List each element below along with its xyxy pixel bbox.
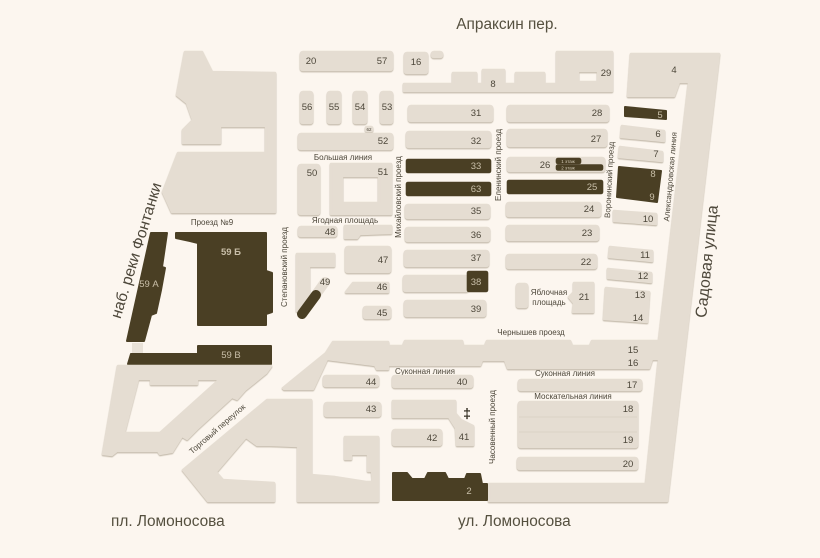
building 41: 41 (459, 432, 469, 443)
building 4 and Садовая улица: 4 (671, 65, 677, 76)
building 22 (506, 254, 597, 269)
building 31: 31 (471, 108, 481, 119)
label: Яблочная площадь: площадь (532, 298, 566, 307)
building 50 (298, 164, 320, 215)
building 62 (365, 126, 373, 132)
building next to 48 (345, 226, 391, 238)
building 5 (625, 107, 666, 121)
building 49 (297, 254, 334, 314)
building 56 (300, 91, 313, 124)
building 21 (569, 283, 593, 312)
building 26: 26 (540, 160, 550, 171)
label: наб. реки Фонтанки: наб. реки Фонтанки (108, 181, 165, 321)
building 41 (393, 401, 473, 445)
building 25: 25 (587, 182, 597, 193)
building 51 (331, 164, 391, 214)
icon: orthodox cross: ‡ (463, 405, 471, 421)
label: ул. Ломоносова: ул. Ломоносова (458, 513, 571, 530)
building 39: 39 (471, 304, 481, 315)
buildings 8 and 9: 9 (649, 192, 655, 203)
building 35 (405, 204, 490, 219)
building 35: 35 (471, 206, 481, 217)
building 21: 21 (579, 292, 589, 303)
building 4 and Садовая улица: 15 (628, 345, 638, 356)
building 23 (506, 225, 599, 241)
building 28: 28 (592, 108, 602, 119)
label: Москательная линия: Москательная линия (534, 392, 612, 401)
building: south-west lower block (183, 400, 378, 501)
buildings 8 and 9: 8 (650, 169, 656, 180)
label: Садовая улица: Садовая улица (693, 204, 722, 319)
building 16 north (404, 52, 428, 74)
building 54: 54 (355, 102, 365, 113)
label: Суконная линия east: Суконная линия (535, 369, 595, 378)
building 37 (404, 250, 489, 267)
label: Воронинский проезд: Воронинский проезд (603, 141, 616, 218)
building 59 А: 59 А (139, 279, 159, 290)
building 45 (363, 306, 391, 319)
building 59 В: 59 В (221, 350, 241, 361)
building 40: 40 (457, 377, 467, 388)
building 47: 47 (378, 255, 388, 266)
buildings 13 and 14 (604, 288, 649, 324)
label: Ягодная площадь: Ягодная площадь (312, 216, 378, 225)
building 23: 23 (582, 228, 592, 239)
buildings 8 and 9 (617, 167, 661, 203)
buildings 13 and 14: 14 (633, 313, 643, 324)
building 27 (507, 129, 607, 147)
building 16 north: 16 (411, 57, 421, 68)
building 26: 1 этаж (561, 159, 575, 164)
building 32 (406, 131, 491, 148)
building 43 (324, 402, 381, 417)
building 53 (380, 91, 393, 124)
building 17 (518, 379, 642, 391)
building 6: 6 (655, 129, 661, 140)
building 33: 33 (471, 161, 481, 172)
building 44 (323, 375, 379, 388)
building 27: 27 (591, 134, 601, 145)
building 38: 38 (471, 277, 481, 288)
label: Чернышев проезд: Чернышев проезд (497, 328, 565, 337)
building 38 (403, 271, 488, 292)
building 20-57: 57 (377, 56, 387, 67)
building 56: 56 (302, 102, 312, 113)
building 24 (506, 202, 601, 217)
building 32: 32 (471, 136, 481, 147)
building 12: 12 (638, 271, 648, 282)
building 63: 63 (471, 184, 481, 195)
building 4 and Садовая улица: 16 (628, 358, 638, 369)
buildings 18 and 19: 18 (623, 404, 633, 415)
building 63 (406, 182, 491, 196)
building 47 (345, 246, 391, 273)
building 52: 52 (378, 136, 388, 147)
building 5: 5 (657, 110, 663, 121)
building 12 (608, 269, 651, 282)
building 36 (405, 227, 490, 242)
buildings 18 and 19: 19 (623, 435, 633, 446)
building 62: 62 (366, 127, 372, 132)
building 10: 10 (643, 214, 653, 225)
building 48: 48 (325, 227, 335, 238)
building 59 Б (176, 233, 272, 325)
building 51: 51 (378, 167, 388, 178)
building 28 (507, 105, 609, 122)
small kiosk (431, 51, 443, 58)
building 48 (298, 226, 337, 238)
building 20-57: 20 (306, 56, 316, 67)
label: Степановский проезд: Степановский проезд (280, 227, 289, 307)
building: south-west frame (103, 366, 271, 455)
building 26 (507, 157, 605, 172)
label: Михайловский проезд: Михайловский проезд (394, 156, 403, 238)
building 33 (406, 159, 491, 173)
building 59 В (128, 346, 271, 364)
building 59 Б: 59 Б (221, 247, 241, 258)
building 54 (353, 91, 367, 124)
building 2: 2 (466, 486, 472, 497)
label: Еленинский проезд: Еленинский проезд (494, 129, 503, 201)
building 42 (392, 429, 442, 446)
building 31 (408, 105, 493, 122)
building 11 (609, 247, 652, 261)
building 37: 37 (471, 253, 481, 264)
buildings 18 and 19 (518, 401, 638, 448)
building 11: 11 (640, 250, 650, 261)
building 36: 36 (471, 230, 481, 241)
building 49: 49 (320, 277, 330, 288)
building 50: 50 (307, 168, 317, 179)
buildings 13 and 14: 13 (635, 290, 645, 301)
building 59 А (127, 233, 167, 341)
buildings 8 and 29 (404, 52, 612, 91)
building 6 (621, 126, 664, 141)
building 46 (346, 282, 388, 293)
building 39 (404, 300, 486, 317)
building 20 south (517, 457, 638, 470)
building 7 (619, 147, 662, 161)
building 10 (614, 211, 656, 225)
building 40 (392, 375, 473, 388)
buildings 8 and 29: 29 (601, 68, 611, 79)
building 53: 53 (382, 102, 392, 113)
label: Часовенный проезд: Часовенный проезд (488, 390, 497, 464)
building 52 (298, 133, 393, 150)
street label: Апраксин пер.: Апраксин пер. (456, 16, 558, 33)
building 44: 44 (366, 377, 376, 388)
connector between 59 А and 59 В (132, 343, 143, 353)
building 55: 55 (329, 102, 339, 113)
building 45: 45 (377, 308, 387, 319)
label: пл. Ломоносова: пл. Ломоносова (111, 513, 225, 530)
building 42: 42 (427, 433, 437, 444)
building 24: 24 (584, 204, 594, 215)
label: Александровская линия: Александровская линия (662, 132, 679, 222)
building beside Яблочная площадь (516, 283, 528, 308)
label: Большая линия: Большая линия (314, 153, 372, 162)
building 2 (393, 473, 487, 500)
label: Суконная линия west: Суконная линия (395, 367, 455, 376)
building: large north-west block (163, 52, 275, 212)
building 4 and Садовая улица (283, 54, 719, 501)
building 7: 7 (653, 149, 659, 160)
label: Проезд №9: Проезд №9 (191, 218, 234, 227)
label: Торговый переулок: Торговый переулок (188, 402, 248, 456)
building 20-57 (300, 51, 393, 71)
building 25 (507, 180, 603, 194)
building 17: 17 (627, 380, 637, 391)
building 20 south: 20 (623, 459, 633, 470)
label: Яблочная площадь: Яблочная (531, 288, 567, 297)
building 46: 46 (377, 282, 387, 293)
building 43: 43 (366, 404, 376, 415)
building 22: 22 (581, 257, 591, 268)
building 55 (327, 91, 341, 124)
buildings 8 and 29: 8 (490, 79, 496, 90)
building 26: 2 этаж (561, 166, 575, 170)
